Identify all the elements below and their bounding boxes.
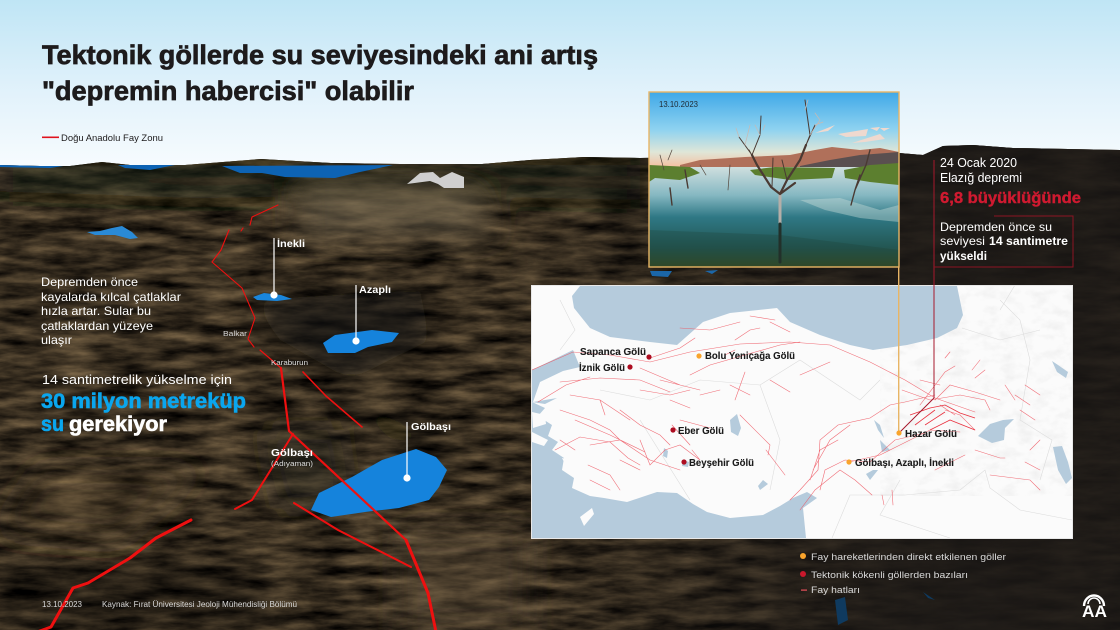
- photo water: [649, 167, 899, 267]
- photo: flooded tree at Hazar lake: [649, 92, 899, 267]
- map labels: lakes: Hazar Gölü: [905, 428, 957, 440]
- callout: 30 million cubic metres: gerekiyor: [69, 413, 167, 436]
- legend: map: Fay hareketlerinden direkt etkilenen göller: [811, 552, 1006, 563]
- photo mountains: [680, 147, 899, 168]
- callout: 30 million cubic metres: [41, 373, 246, 436]
- title: Tektonik göllerde su seviyesindeki ani artış: [42, 40, 598, 70]
- map labels: lakes: Bolu Yeniçağa Gölü: [705, 350, 795, 362]
- lake: Gölbaşı: [311, 449, 447, 517]
- label: Balkar: Balkar: [223, 329, 248, 338]
- legend: East Anatolian Fault Zone: Doğu Anadolu Fay Zonu: [61, 133, 163, 144]
- map labels: lakes: [579, 346, 957, 469]
- text block: Elazığ earthquake: Elazığ depremi: [940, 171, 1022, 185]
- callout: 30 million cubic metres: 30 milyon metreküp: [41, 390, 246, 413]
- marker: Azaplı: [352, 285, 360, 345]
- photo reflections: [800, 198, 899, 222]
- label: Gölbaşı town: (Adıyaman): [271, 459, 314, 468]
- text block: Elazığ earthquake: 6,8 büyüklüğünde: [940, 190, 1081, 207]
- lake: distant western lake: [87, 226, 138, 239]
- callout box: water level rise: seviyesi: [940, 234, 985, 248]
- label: Gölbaşı lake: Gölbaşı: [411, 422, 451, 433]
- label: İnekli: İnekli: [277, 237, 305, 250]
- lake: İnekli: [253, 293, 292, 301]
- map labels: lakes: Gölbaşı, Azaplı, İnekli: [855, 456, 954, 469]
- map seas: [532, 286, 963, 538]
- panel: Turkey fault map: [532, 285, 1072, 538]
- icon: AA logo: AA: [1082, 602, 1107, 621]
- map markers: lakes: [627, 353, 902, 465]
- legend: map: Fay hatları: [811, 585, 860, 596]
- title: "depremin habercisi" olabilir: [42, 76, 414, 106]
- label: Gölbaşı town: Gölbaşı: [271, 447, 313, 459]
- footer: date and source: 13.10.2023: [42, 599, 82, 609]
- horizon water: [0, 165, 393, 178]
- label: Gölbaşı town: [271, 447, 314, 468]
- map islands: [532, 412, 594, 526]
- text block: explanation: ulaşır: [41, 333, 72, 347]
- marker: İnekli: [270, 238, 278, 299]
- fault cluster: [910, 405, 975, 430]
- marker: Gölbaşı: [403, 422, 411, 482]
- background: sky: [0, 0, 1120, 170]
- map labels: lakes: Sapanca Gölü: [580, 346, 646, 358]
- callout box: water level rise: Depremden önce su: [940, 220, 1052, 234]
- fault lines: East Anatolian Fault Zone: [37, 205, 436, 630]
- footer: date and source: Kaynak: Fırat Üniversitesi Jeoloji Mühendisliği Bölümü: [102, 599, 297, 609]
- text block: explanation: kayalarda kılcal çatlaklar: [41, 290, 181, 304]
- connector: photo to Hazar lake: [898, 267, 899, 432]
- photo date: 13.10.2023: [659, 99, 698, 109]
- callout: 30 million cubic metres: 14 santimetrelik yükselme için: [42, 373, 232, 387]
- map labels: lakes: İznik Gölü: [579, 361, 625, 374]
- photo tree: [660, 100, 870, 262]
- photo clouds: [815, 125, 890, 143]
- map borders: [560, 285, 1072, 538]
- text block: explanation: hızla artar. Sular bu: [41, 304, 151, 318]
- text block: explanation: çatlaklardan yüzeye: [41, 319, 153, 333]
- legend: map: [800, 552, 1006, 596]
- photo small trees: [670, 150, 870, 205]
- background: satellite terrain: [0, 140, 1120, 630]
- callout box: water level rise: yükseldi: [940, 249, 987, 263]
- snow patch: [407, 172, 464, 188]
- text block: Elazığ earthquake: 24 Ocak 2020: [940, 156, 1017, 170]
- callout: 30 million cubic metres: su: [41, 413, 64, 436]
- map fault lines: [532, 316, 1040, 510]
- text block: Elazığ earthquake: [940, 156, 1081, 207]
- photo frame: [649, 92, 899, 267]
- legend: map: Tektonik kökenli göllerden bazıları: [811, 570, 968, 581]
- map labels: lakes: Beyşehir Gölü: [689, 457, 754, 469]
- map terrain shading: [880, 286, 1072, 496]
- map labels: lakes: Eber Gölü: [678, 425, 724, 437]
- text block: explanation: Depremden önce: [41, 275, 138, 289]
- label: Karaburun: Karaburun: [271, 358, 308, 367]
- photo reeds: [649, 163, 899, 185]
- lake: Azaplı: [323, 330, 399, 353]
- label: Azaplı: Azaplı: [359, 285, 391, 296]
- title: [42, 40, 598, 106]
- callout box: water level rise: 14 santimetre: [989, 234, 1068, 248]
- text block: explanation: [41, 275, 181, 347]
- connector: earthquake callout to Hazar lake: [900, 160, 934, 432]
- map frame: [532, 286, 1072, 538]
- callout box: water level rise: [934, 216, 1073, 267]
- dark right side overlay: [500, 140, 1120, 630]
- map lakes: [663, 361, 1072, 490]
